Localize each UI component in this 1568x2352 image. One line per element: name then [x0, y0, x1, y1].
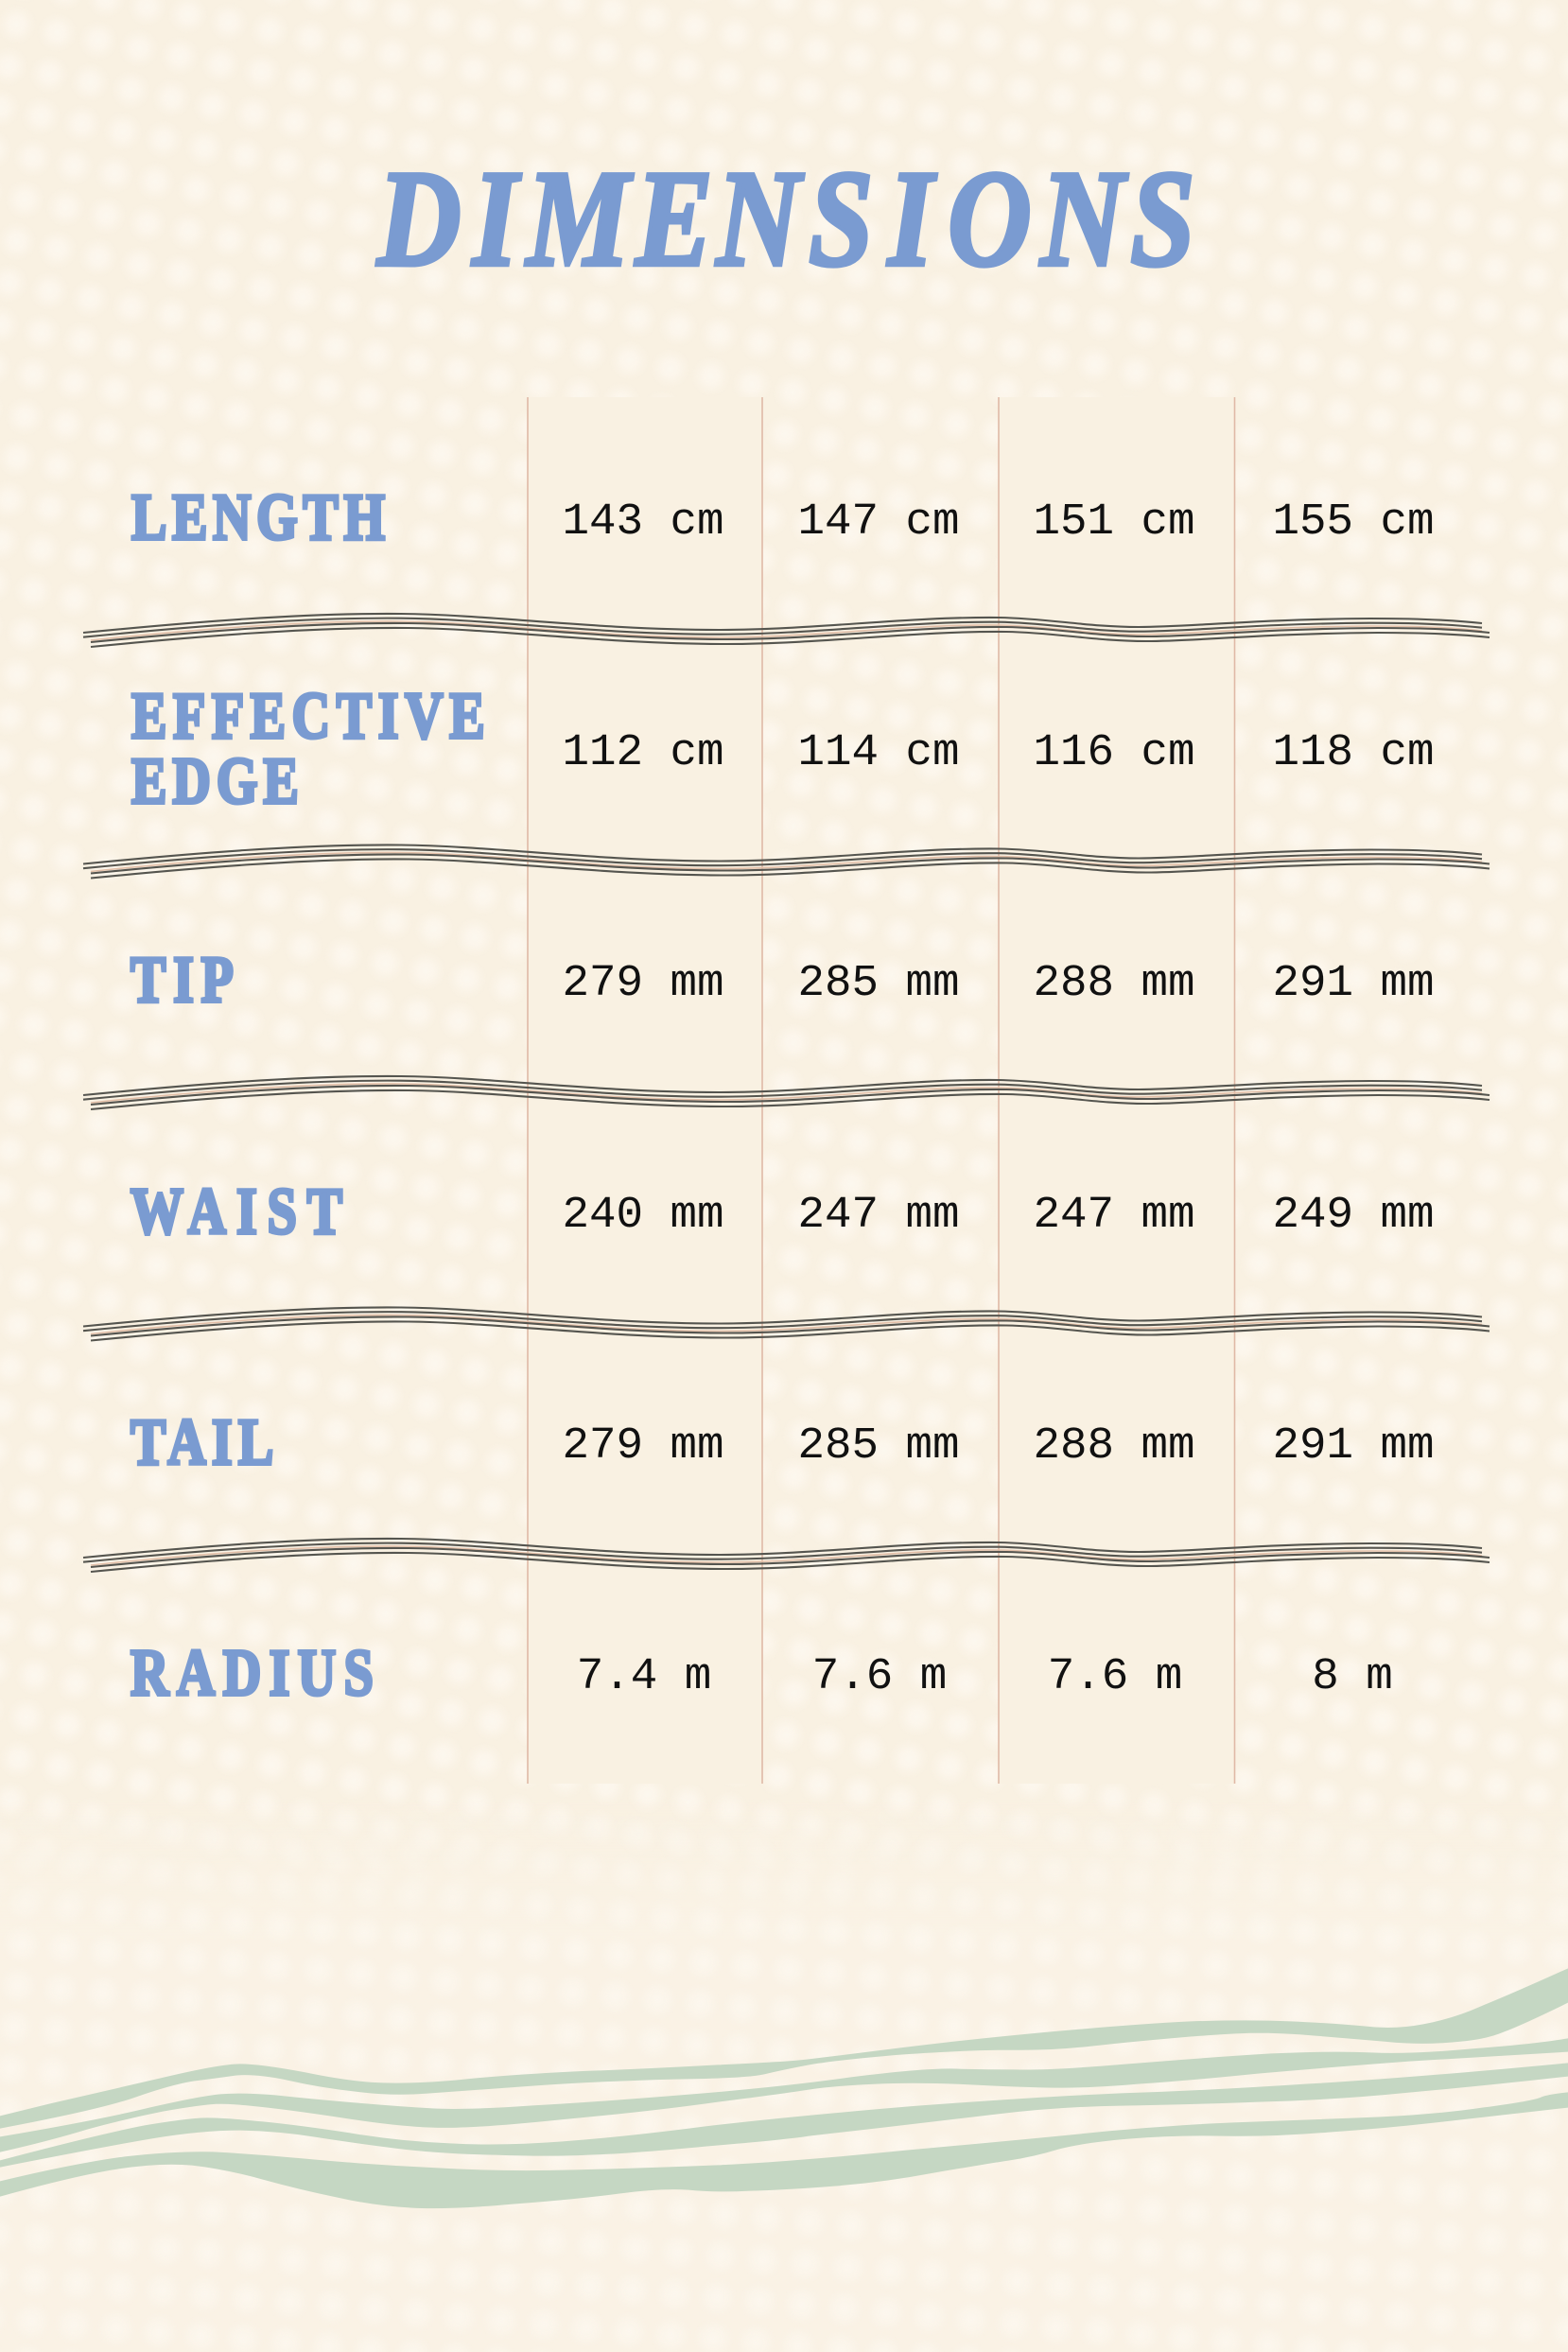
row label: effective edge: EDGE	[131, 744, 299, 817]
values: tail: 285 mm	[797, 1420, 960, 1472]
row label: radius: RADIUS	[131, 1636, 374, 1709]
values: tail	[562, 1420, 1435, 1472]
values: effective edge	[562, 727, 1435, 778]
values: tail: 291 mm	[1272, 1420, 1435, 1472]
values: tip: 291 mm	[1272, 958, 1435, 1009]
row label: tip: TIP	[131, 943, 234, 1016]
row: tip	[131, 943, 1435, 1016]
values: tip: 288 mm	[1033, 958, 1195, 1009]
values: length: 155 cm	[1272, 497, 1435, 548]
values: tip	[562, 958, 1435, 1009]
values: radius: 7.6 m	[1048, 1651, 1182, 1702]
row label: length: LENGTH	[131, 480, 385, 553]
values: radius: 7.4 m	[577, 1651, 711, 1702]
row label: effective edge: EFFECTIVE	[131, 679, 485, 752]
values: waist: 247 mm	[797, 1190, 960, 1241]
values: effective edge: 114 cm	[797, 727, 960, 778]
values: waist: 240 mm	[562, 1190, 724, 1241]
values: tip: 279 mm	[562, 958, 724, 1009]
title: DIMENSIONS	[376, 143, 1195, 295]
values: effective edge: 112 cm	[562, 727, 724, 778]
row label: waist: WAIST	[131, 1175, 342, 1247]
values: length: 151 cm	[1033, 497, 1195, 548]
panel: solid table column bands	[528, 397, 1234, 1784]
values: waist	[562, 1190, 1435, 1241]
values: tail: 279 mm	[562, 1420, 724, 1472]
values: effective edge: 118 cm	[1272, 727, 1435, 778]
values: length	[562, 497, 1435, 548]
values: length: 147 cm	[797, 497, 960, 548]
values: effective edge: 116 cm	[1033, 727, 1195, 778]
row: waist	[131, 1175, 1435, 1247]
values: tail: 288 mm	[1033, 1420, 1195, 1472]
values: waist: 249 mm	[1272, 1190, 1435, 1241]
values: radius: 7.6 m	[812, 1651, 947, 1702]
row: length	[131, 480, 1435, 553]
values: length: 143 cm	[562, 497, 724, 548]
values: waist: 247 mm	[1033, 1190, 1195, 1241]
green wave ribbons	[0, 1969, 1568, 2207]
row label: effective edge	[131, 679, 485, 817]
values: radius	[577, 1651, 1393, 1702]
row: tail	[131, 1405, 1435, 1478]
row label: tail: TAIL	[131, 1405, 273, 1478]
values: tip: 285 mm	[797, 958, 960, 1009]
row: effective edge	[131, 679, 1435, 817]
values: radius: 8 m	[1312, 1651, 1393, 1702]
row: radius	[131, 1636, 1393, 1709]
